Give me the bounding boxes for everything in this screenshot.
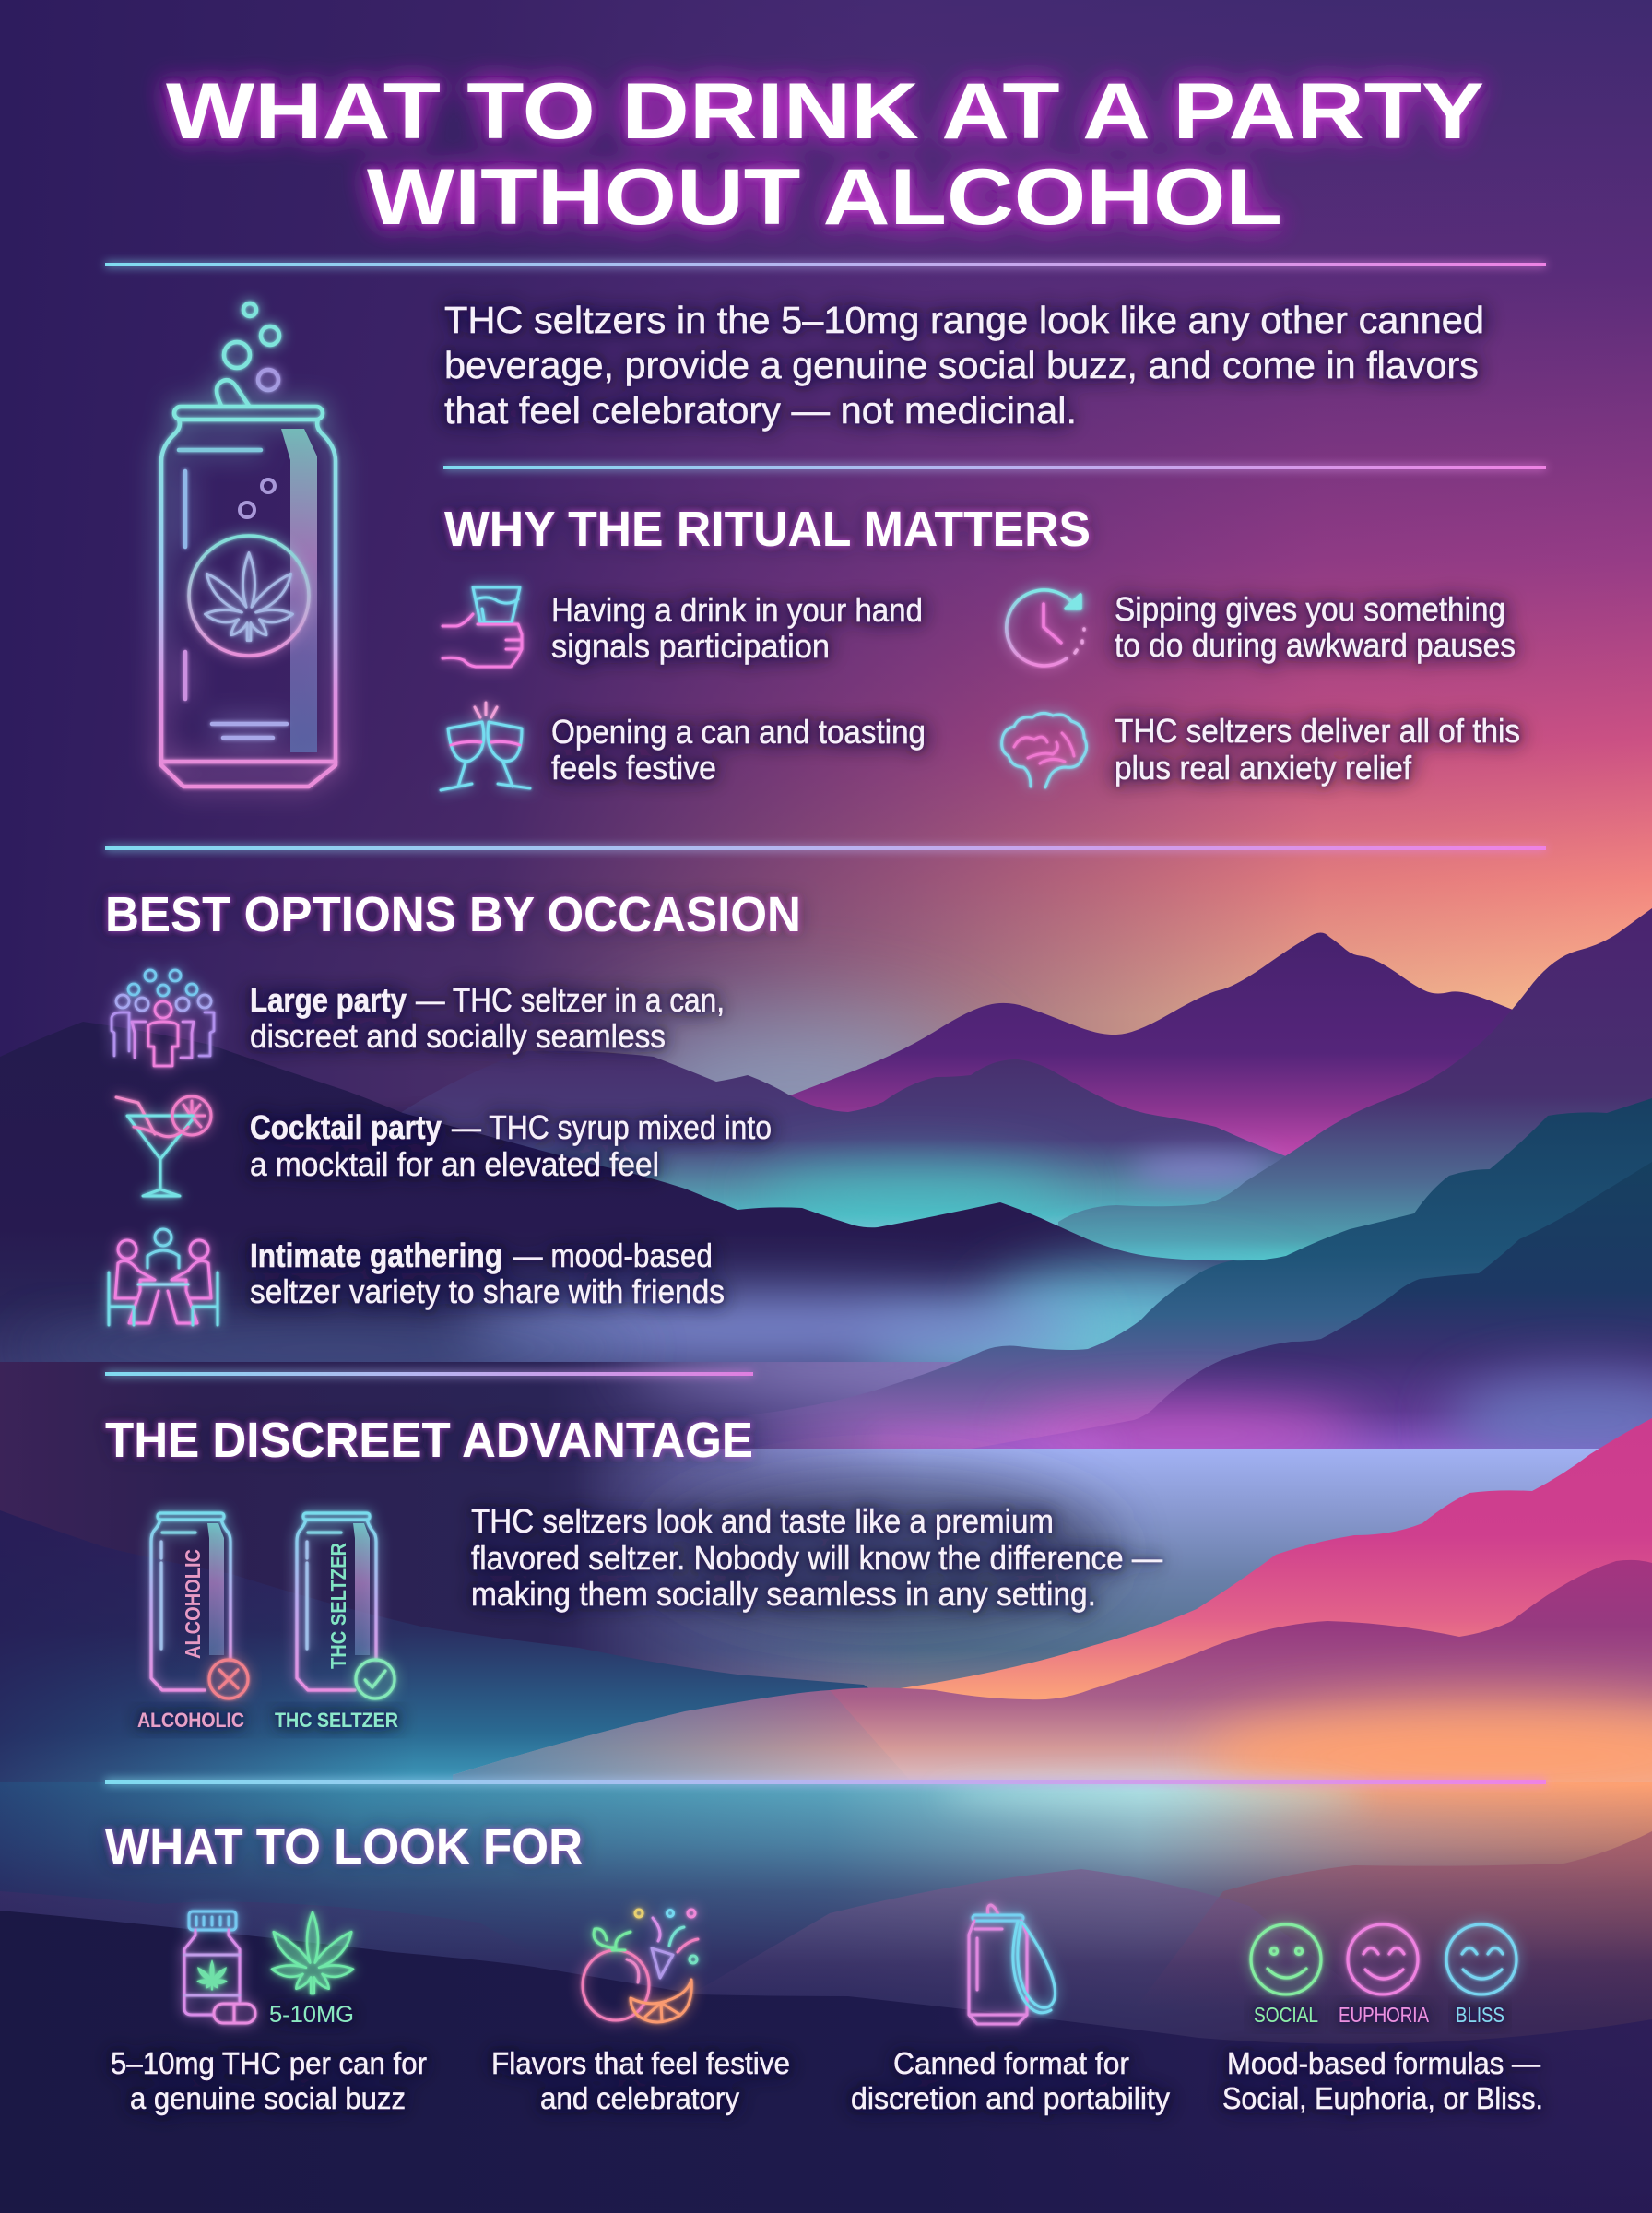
text: sipping: to do during awkward pauses bbox=[1115, 626, 1516, 664]
icon: thc seltzer can bbox=[297, 1513, 395, 1698]
item: canned format bbox=[851, 1905, 1170, 2115]
item: dose bbox=[111, 1911, 427, 2115]
text: canned format: Canned format for bbox=[893, 2046, 1129, 2080]
text: cocktail party: Cocktail party bbox=[250, 1108, 442, 1146]
divider above what to look for bbox=[105, 1780, 1546, 1784]
text: dose: 5–10mg THC per can for bbox=[111, 2046, 427, 2080]
text: mood formulas: Mood-based formulas — bbox=[1227, 2046, 1540, 2080]
text: cocktail party: — THC syrup mixed into bbox=[452, 1108, 772, 1146]
text: flavors bbox=[491, 2046, 790, 2115]
icon: fruit and confetti bbox=[583, 1910, 698, 2022]
paragraph: discreet advantage: making them socially seamless in any setting. bbox=[471, 1575, 1096, 1613]
heading: why the ritual matters: WHY THE RITUAL MATTERS bbox=[444, 502, 1091, 557]
divider under intro bbox=[443, 466, 1546, 469]
can bubbles bbox=[224, 303, 279, 390]
intro paragraph: THC seltzers in the 5–10mg range look like any other canned bbox=[444, 299, 1484, 341]
icon: clock bbox=[1007, 590, 1084, 666]
title: WHAT TO DRINK AT A PARTY bbox=[166, 67, 1484, 156]
text: large party bbox=[250, 981, 725, 1055]
text: cocktail party bbox=[250, 1108, 772, 1183]
text: canned format bbox=[851, 2046, 1170, 2115]
can inner bubbles bbox=[240, 479, 275, 517]
icon: bliss face bbox=[1446, 1924, 1516, 1994]
text: thc seltzers deliver: THC seltzers deliver all of this bbox=[1115, 712, 1520, 750]
icon: can with strap bbox=[969, 1905, 1056, 2024]
text: cocktail party: a mocktail for an elevated feel bbox=[250, 1145, 659, 1183]
panel: what to look for items bbox=[111, 1905, 1543, 2115]
label: dose amount: 5-10MG bbox=[269, 2002, 354, 2028]
icon: pill bottle and leaf bbox=[184, 1911, 353, 2023]
label: bliss: BLISS bbox=[1456, 2003, 1504, 2027]
icon: hand holding drink bbox=[442, 587, 522, 667]
text: sipping bbox=[1115, 590, 1516, 664]
divider above discreet advantage bbox=[105, 1372, 753, 1376]
label: alcoholic: ALCOHOLIC bbox=[137, 1709, 244, 1732]
icon: neon seltzer can bbox=[161, 303, 336, 787]
text: opening a can bbox=[551, 713, 926, 787]
label: euphoria: EUPHORIA bbox=[1339, 2003, 1430, 2027]
panel: can comparison bbox=[137, 1513, 398, 1732]
text: intimate gathering: Intimate gathering bbox=[250, 1237, 502, 1274]
text: canned format: discretion and portability bbox=[851, 2081, 1170, 2115]
text: thc seltzers deliver bbox=[1115, 712, 1520, 787]
icon: alcoholic can: ALCOHOLIC bbox=[181, 1549, 205, 1659]
text: large party: Large party bbox=[250, 981, 407, 1019]
item: mood formulas bbox=[1222, 1924, 1543, 2115]
item: flavors bbox=[491, 1910, 790, 2115]
icon: toasting glasses bbox=[441, 703, 530, 790]
text: mood formulas: Social, Euphoria, or Bliss. bbox=[1222, 2081, 1543, 2115]
panel: ritual reasons bbox=[441, 587, 1520, 790]
text: dose bbox=[111, 2046, 427, 2115]
intro paragraph bbox=[444, 299, 1484, 432]
text: intimate gathering: — mood-based bbox=[513, 1237, 713, 1274]
divider above occasions bbox=[105, 846, 1546, 850]
text: opening a can: feels festive bbox=[551, 749, 716, 787]
divider under title bbox=[105, 263, 1546, 266]
text: intimate gathering bbox=[250, 1237, 725, 1310]
paragraph: discreet advantage: THC seltzers look and taste like a premium bbox=[471, 1502, 1054, 1540]
title bbox=[166, 67, 1484, 242]
text: large party: discreet and socially seamless bbox=[250, 1017, 666, 1055]
heading: the discreet advantage: THE DISCREET ADVANTAGE bbox=[105, 1413, 753, 1468]
icon: brain bbox=[1002, 713, 1087, 787]
text: intimate gathering: seltzer variety to share with friends bbox=[250, 1272, 725, 1310]
heading: what to look for: WHAT TO LOOK FOR bbox=[105, 1819, 583, 1875]
text: sipping: Sipping gives you something bbox=[1115, 590, 1505, 628]
can highlight strip bbox=[281, 429, 317, 752]
title: WITHOUT ALCOHOL bbox=[367, 153, 1282, 242]
icon: cocktail bbox=[116, 1096, 211, 1196]
intro paragraph: beverage, provide a genuine social buzz, and come in flavors bbox=[444, 344, 1479, 386]
icon: social face bbox=[1251, 1924, 1321, 1994]
cannabis emblem bbox=[189, 536, 309, 656]
text: having a drink: signals participation bbox=[551, 627, 830, 665]
text: opening a can: Opening a can and toasting bbox=[551, 713, 926, 751]
can outline bbox=[161, 380, 336, 787]
text: large party: — THC seltzer in a can, bbox=[416, 981, 725, 1019]
icon: alcoholic can bbox=[151, 1513, 248, 1698]
text: dose: a genuine social buzz bbox=[130, 2081, 406, 2115]
label: thc seltzer: THC SELTZER bbox=[275, 1709, 398, 1732]
intro paragraph: that feel celebratory — not medicinal. bbox=[444, 389, 1077, 432]
text: having a drink: Having a drink in your hand bbox=[551, 591, 923, 629]
heading: best options by occasion: BEST OPTIONS BY OCCASION bbox=[105, 887, 801, 942]
label: social: SOCIAL bbox=[1254, 2003, 1318, 2027]
panel: occasions list bbox=[109, 970, 772, 1325]
text: flavors: Flavors that feel festive bbox=[491, 2046, 790, 2080]
text: having a drink bbox=[551, 591, 923, 665]
text: thc seltzers deliver: plus real anxiety relief bbox=[1115, 749, 1412, 787]
text: mood formulas bbox=[1222, 2046, 1543, 2115]
icon: euphoria face bbox=[1348, 1924, 1418, 1994]
text: flavors: and celebratory bbox=[540, 2081, 739, 2115]
icon: intimate gathering bbox=[109, 1229, 218, 1325]
paragraph: discreet advantage bbox=[471, 1502, 1162, 1613]
paragraph: discreet advantage: flavored seltzer. Nobody will know the difference — bbox=[471, 1539, 1162, 1577]
icon: crowd bbox=[112, 970, 214, 1066]
icon: thc seltzer can: THC SELTZER bbox=[326, 1543, 350, 1669]
